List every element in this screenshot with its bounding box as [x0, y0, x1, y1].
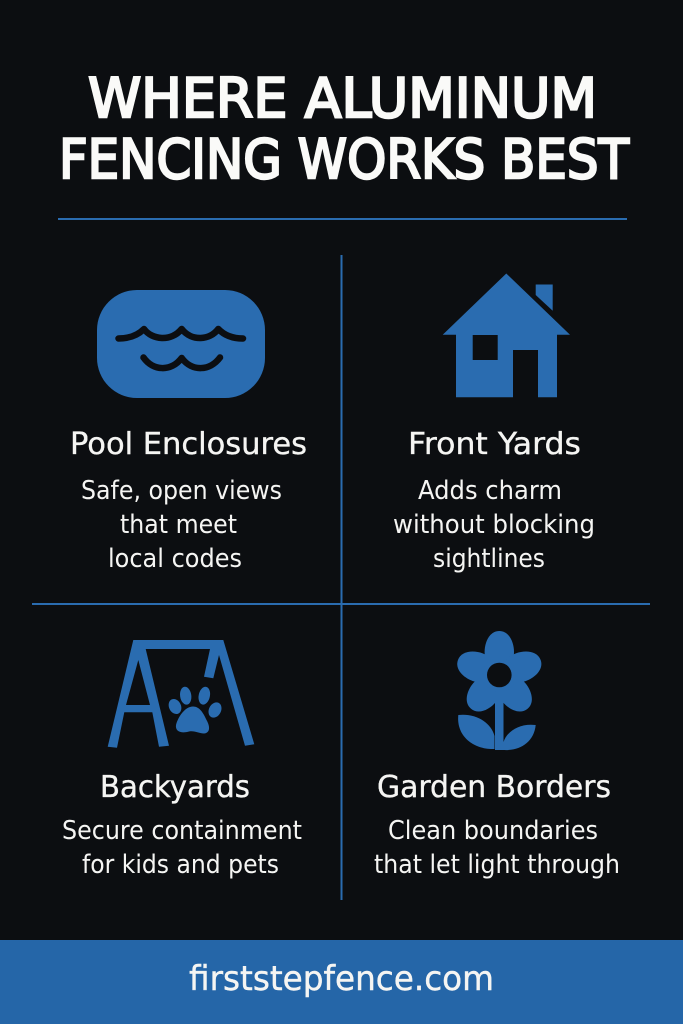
text: backyards description: [62, 816, 302, 880]
text: garden description: that let light through: [374, 850, 620, 880]
text: garden description: [374, 816, 620, 880]
text: pool description: Safe, open views: [81, 476, 282, 506]
text: backyards description: Secure containment: [62, 816, 302, 846]
heading: backyards: Backyards: [100, 770, 250, 805]
panel: front yards: [393, 274, 595, 574]
icon: pool water: [97, 290, 265, 398]
footer banner: firststepfence.com: [189, 959, 494, 999]
text: backyards description: for kids and pets: [82, 850, 279, 880]
text: front yards description: without blocking: [393, 510, 595, 540]
heading: pool enclosures: Pool Enclosures: [70, 427, 307, 462]
icon: swing with paw: [108, 640, 254, 748]
text: pool description: that meet: [120, 510, 237, 540]
text: garden description: Clean boundaries: [388, 816, 598, 846]
text: front yards description: sightlines: [433, 544, 545, 574]
panel: pool enclosures: [70, 290, 307, 574]
heading: front yards: Front Yards: [408, 427, 581, 462]
text: pool description: local codes: [108, 544, 242, 574]
icon: house: [443, 274, 570, 397]
title: FENCING WORKS BEST: [59, 128, 630, 191]
footer banner: [0, 940, 683, 1024]
panel: garden borders: [374, 631, 620, 880]
icon: paw: [166, 686, 224, 734]
icon: flower: [453, 631, 546, 750]
title: WHERE ALUMINUM: [88, 67, 597, 130]
text: pool description: [81, 476, 282, 574]
text: front yards description: Adds charm: [418, 476, 562, 506]
panel: backyards: [62, 640, 302, 880]
heading: garden borders: Garden Borders: [377, 770, 611, 805]
title: [59, 67, 630, 191]
text: front yards description: [393, 476, 595, 574]
